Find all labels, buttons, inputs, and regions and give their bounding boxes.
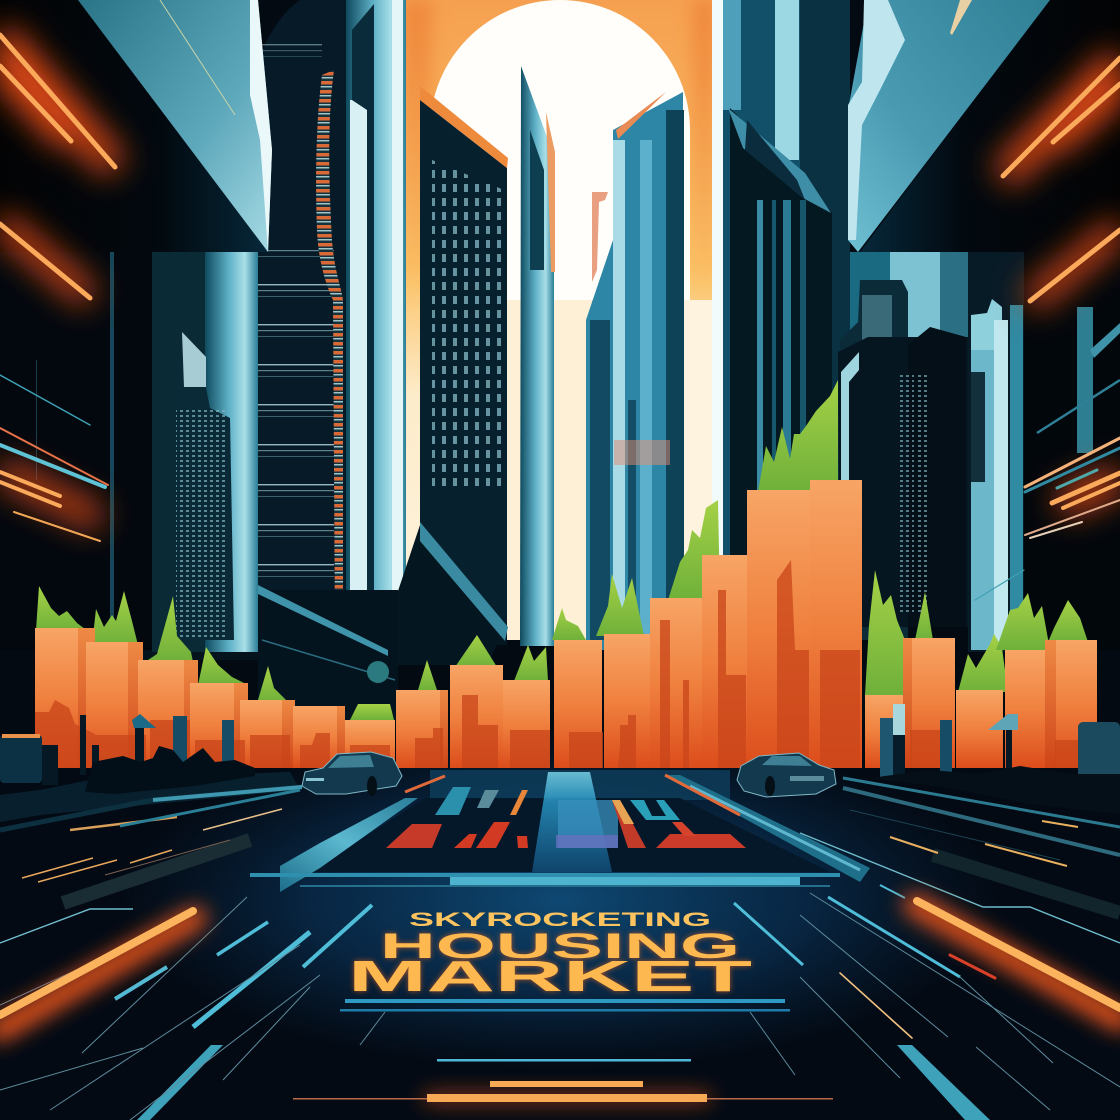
road central panel (310, 798, 830, 872)
light streaks: orange core (0, 901, 1120, 1038)
light streaks: wide cyan (137, 1045, 990, 1120)
title: Skyrocketing Housing Market: MARKET (348, 952, 752, 1001)
tower: right columns top (712, 0, 850, 600)
awning: right dark underside (860, 0, 1120, 252)
title: Skyrocketing Housing Market: MARKET (348, 952, 752, 1001)
street furniture right (870, 704, 1120, 814)
neon streaks: upper right (1003, 58, 1120, 301)
tower: right skyline cluster (838, 252, 970, 640)
tower: left mid teal block (100, 240, 260, 660)
awning: left dark underside (0, 0, 268, 252)
bar chart: orange rising buildings (35, 480, 1097, 768)
tower: striped curved (258, 0, 348, 650)
blue underline bars (340, 999, 790, 1012)
tower: teal column left of centre (346, 0, 406, 645)
neon glow haze (0, 35, 1120, 520)
sun (430, 0, 690, 300)
awning: left teal face (78, 0, 272, 252)
road (0, 768, 1120, 1120)
grass behind bars (36, 380, 1088, 720)
road beam (532, 772, 612, 872)
left block base (0, 250, 152, 650)
street furniture left (0, 714, 300, 822)
car left (302, 752, 402, 796)
bottom bars (293, 1059, 833, 1102)
light streaks: thin grey (0, 893, 1120, 1120)
right block base (1024, 250, 1120, 650)
skyline reflections in bars (35, 560, 1095, 768)
road edges and lane streaks right (800, 778, 1120, 943)
tower: centre spire (520, 66, 555, 646)
sunset sky (402, 0, 716, 640)
elevated walkway behind bars (258, 585, 398, 720)
tower: right teal glass (968, 252, 1026, 652)
tower: dark peaked (728, 108, 832, 558)
road lane markings: data-like glyphs (386, 787, 746, 848)
car right (737, 753, 836, 797)
road centre glow (120, 730, 1000, 1070)
road upper strip (430, 770, 730, 800)
title: Skyrocketing Housing Market: HOUSING (380, 927, 740, 966)
tower: right of centre glass (586, 92, 712, 650)
title: Skyrocketing Housing Market: HOUSING (380, 927, 740, 966)
light streaks: orange glow (0, 905, 1120, 1098)
title: Skyrocketing Housing Market: SKYROCKETING (409, 910, 711, 931)
road side lanes (280, 775, 870, 892)
neon streaks: mid right (975, 438, 1120, 600)
awning: right teal face (848, 0, 1050, 252)
road edges and lane streaks left (0, 787, 302, 943)
light streaks: cyan (115, 885, 960, 1027)
horizontal road band (250, 873, 840, 887)
tower: centre dark with windows (395, 86, 508, 665)
title: Skyrocketing Housing Market (348, 910, 752, 1001)
neon streaks: upper left (0, 35, 115, 298)
neon streaks: mid left (0, 375, 108, 541)
